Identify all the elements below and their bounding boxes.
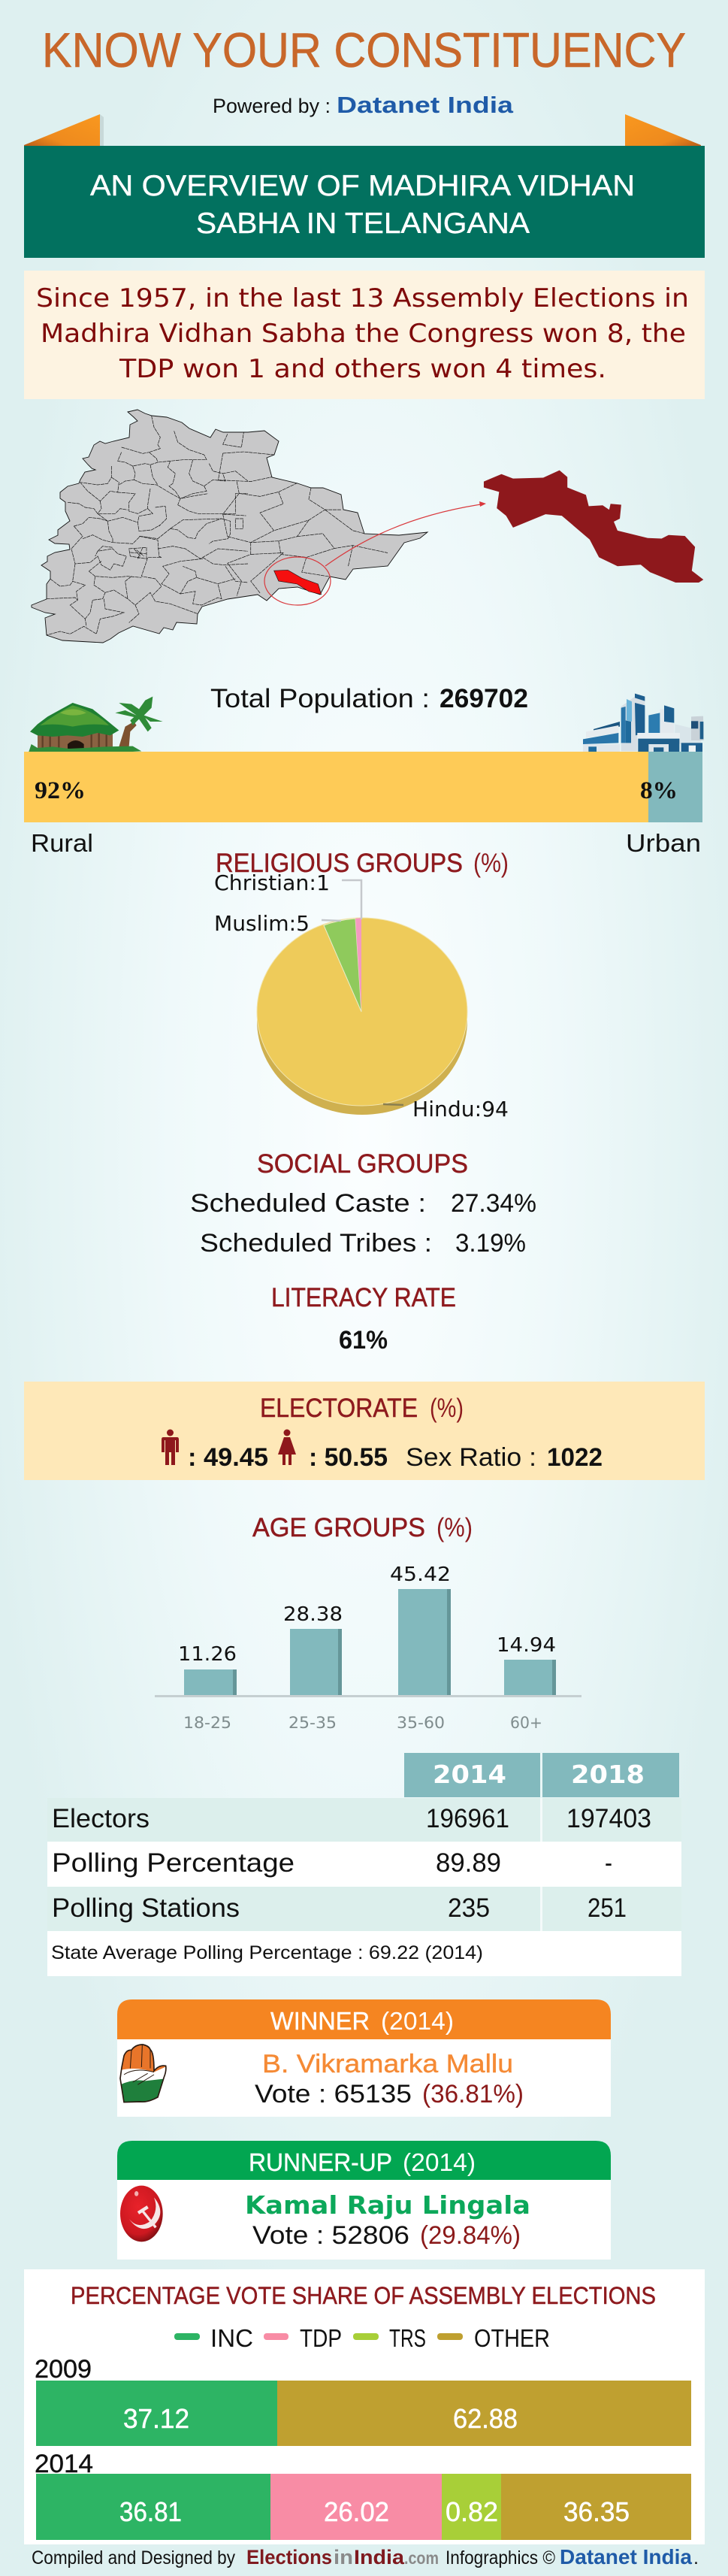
electors and polling table: 235 [448, 1893, 490, 1923]
powered by line [213, 92, 514, 118]
electorate panel: ELECTORATE [260, 1394, 418, 1423]
electors and polling table: Electors [52, 1804, 150, 1833]
pie chart: religious groups: Hindu:94 [412, 1097, 509, 1122]
stacked bar 2014: 36.81 [119, 2496, 182, 2527]
winner card: Vote : 65135 [255, 2080, 412, 2108]
stacked bar 2014: 26.02 [324, 2496, 389, 2527]
title banner: AN OVERVIEW OF MADHIRA VIDHAN [90, 170, 635, 202]
electors and polling table: - [605, 1848, 612, 1878]
pie chart: religious groups: Muslim:5 [214, 911, 310, 936]
vote share heading: PERCENTAGE VOTE SHARE OF ASSEMBLY ELECTIONS [71, 2282, 656, 2309]
stacked bar 2014: 36.35 [563, 2496, 630, 2527]
religious groups heading: (%) [473, 849, 509, 878]
bar chart: age groups: 45.42 [390, 1563, 451, 1586]
bar chart: age groups: 28.38 [283, 1603, 343, 1626]
electorate panel: 1022 [547, 1443, 603, 1472]
electors and polling table [47, 1753, 681, 1976]
legend: TDP [300, 2324, 342, 2352]
winner card: WINNER [270, 2007, 370, 2035]
total population: Total Population : [210, 684, 430, 713]
electorate panel: (%) [430, 1394, 464, 1423]
stacked bar 2009 [35, 2355, 691, 2446]
bar chart: age groups: 18-25 [183, 1714, 231, 1732]
bar chart: age groups: 14.94 [497, 1634, 556, 1657]
bar chart: age groups: 11.26 [178, 1643, 237, 1666]
religious groups heading: RELIGIOUS GROUPS [216, 849, 463, 878]
winner card: (2014) [381, 2007, 454, 2035]
winner card: B. Vikramarka Mallu [262, 2050, 513, 2078]
icon: urban buildings [583, 694, 704, 752]
literacy rate: 61% [339, 1326, 388, 1355]
social groups [190, 1149, 536, 1258]
legend [174, 2324, 550, 2352]
footer credits: . [693, 2547, 699, 2568]
social groups: Scheduled Tribes : [200, 1229, 432, 1258]
summary statement box: Madhira Vidhan Sabha the Congress won 8, the [41, 319, 686, 349]
electorate panel: : 49.45 [188, 1443, 268, 1472]
footer credits: in [334, 2546, 353, 2568]
title banner [24, 146, 705, 258]
electors and polling table: Polling Percentage [52, 1848, 295, 1878]
map of Telangana [32, 410, 427, 643]
rural urban bar: 8% [640, 777, 678, 804]
summary statement box: TDP won 1 and others won 4 times. [119, 354, 606, 384]
social groups: SOCIAL GROUPS [257, 1149, 468, 1179]
electors and polling table: 2014 [433, 1760, 506, 1789]
age groups heading: AGE GROUPS [252, 1513, 425, 1542]
legend: INC [210, 2324, 253, 2352]
winner card: (36.81%) [422, 2080, 524, 2108]
electorate panel: Sex Ratio : [406, 1443, 536, 1472]
stacked bar 2014: 2014 [35, 2450, 93, 2478]
literacy rate [271, 1283, 456, 1355]
social groups: 3.19% [455, 1229, 526, 1258]
icon: congress hand [119, 2044, 167, 2103]
panel: vote share of assembly elections [24, 2269, 705, 2544]
pie chart: religious groups [214, 870, 509, 1122]
winner card [117, 1999, 611, 2117]
pie chart: religious groups: Christian:1 [214, 870, 330, 895]
powered by line: Datanet India [337, 92, 514, 118]
runner-up card: (29.84%) [420, 2221, 521, 2250]
icon: woman [278, 1430, 296, 1465]
ribbon folds [24, 114, 701, 146]
footer credits: .com [404, 2548, 439, 2568]
bar chart: age groups: 60+ [510, 1714, 542, 1732]
title banner: SABHA IN TELANGANA [196, 207, 530, 240]
electors and polling table: 251 [588, 1893, 627, 1923]
literacy rate: LITERACY RATE [271, 1283, 456, 1312]
stacked bar 2009: 62.88 [453, 2403, 518, 2434]
icon: hammer and sickle [120, 2186, 163, 2242]
constituency enlarged shape [484, 471, 703, 583]
legend: OTHER [474, 2324, 550, 2352]
electors and polling table: 196961 [426, 1804, 509, 1833]
electors and polling table: 197403 [566, 1804, 651, 1833]
rural label: Rural [31, 829, 93, 857]
electors and polling table: Polling Stations [52, 1893, 240, 1923]
bar chart: age groups: 25-35 [288, 1714, 337, 1732]
social groups: 27.34% [451, 1189, 536, 1218]
urban label: Urban [626, 829, 701, 857]
summary statement box: Since 1957, in the last 13 Assembly Elections in [36, 283, 689, 313]
footer credits [32, 2545, 699, 2568]
footer credits: Infographics © [446, 2547, 556, 2568]
runner-up card: RUNNER-UP [249, 2148, 392, 2176]
total population: 269702 [440, 684, 528, 713]
electors and polling table: State Average Polling Percentage : 69.22 (2014) [51, 1942, 483, 1963]
title: KNOW YOUR CONSTITUENCY [42, 23, 686, 77]
runner-up card: Kamal Raju Lingala [245, 2190, 530, 2220]
footer credits: Compiled and Designed by [32, 2547, 235, 2568]
stacked bar 2009: 37.12 [123, 2403, 189, 2434]
rural urban bar: 92% [35, 777, 86, 804]
runner-up card: Vote : 52806 [252, 2221, 409, 2250]
legend: TRS [389, 2324, 426, 2352]
stacked bar 2014: 0.82 [446, 2496, 498, 2527]
age groups heading: (%) [436, 1513, 473, 1542]
runner-up card [117, 2141, 611, 2260]
footer credits: Elections [246, 2546, 332, 2568]
locator circle and arrow [264, 501, 486, 605]
summary statement box [24, 271, 705, 399]
stacked bar 2009: 2009 [35, 2355, 92, 2384]
footer credits: India [354, 2546, 405, 2568]
social groups: Scheduled Caste : [190, 1189, 426, 1218]
footer credits: Datanet India [560, 2545, 692, 2568]
electors and polling table: 89.89 [436, 1848, 501, 1878]
icon: rural hut and palm [29, 697, 163, 752]
bar chart: age groups [155, 1563, 581, 1732]
powered by line: Powered by : [213, 95, 331, 117]
electorate panel [24, 1382, 705, 1480]
bar chart: age groups: 35-60 [397, 1714, 445, 1732]
icon: man [162, 1430, 179, 1465]
total population [210, 684, 528, 713]
electors and polling table: 2018 [571, 1760, 645, 1789]
electorate panel: : 50.55 [309, 1443, 388, 1472]
stacked bar 2014 [35, 2450, 691, 2540]
rural urban bar [24, 752, 702, 822]
runner-up card: (2014) [403, 2148, 476, 2176]
